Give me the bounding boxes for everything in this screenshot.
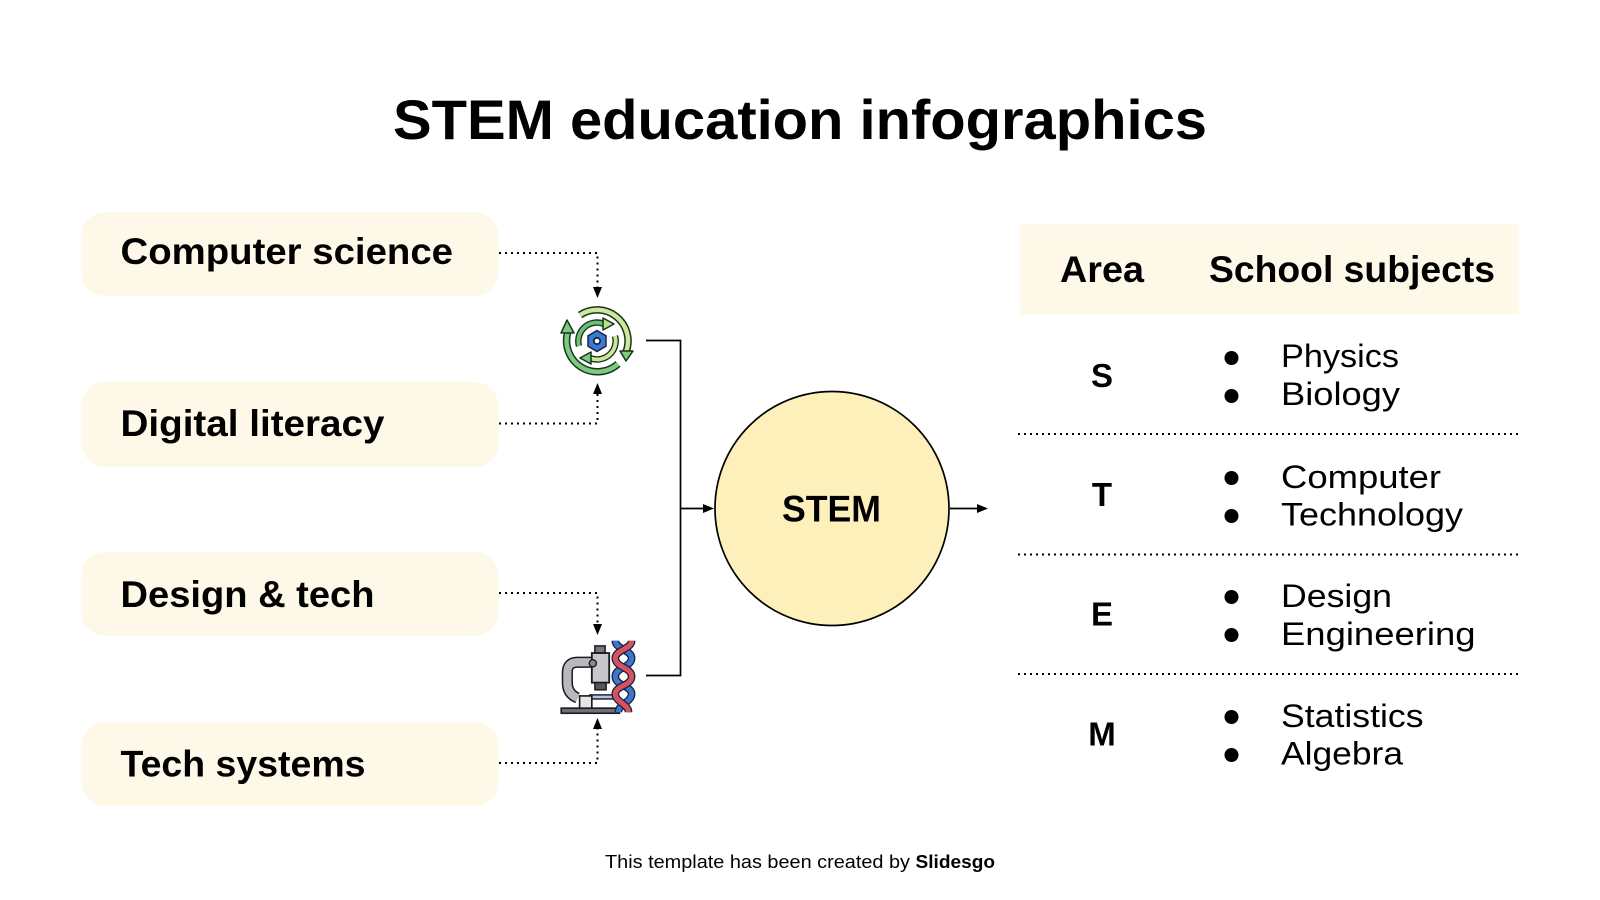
icon: microscope and DNA <box>561 641 632 713</box>
row: S: S <box>1091 357 1113 394</box>
row: E: Design <box>1281 578 1392 614</box>
panel: Design & tech: Design & tech <box>120 574 374 615</box>
circle: STEM <box>715 392 949 626</box>
arrow: Design & tech to microscope icon <box>499 593 602 635</box>
row: E <box>1091 578 1476 652</box>
row: E: Engineering <box>1281 616 1476 652</box>
row: S: Biology <box>1281 376 1400 412</box>
row: E: E <box>1091 596 1113 632</box>
footer credit: Slidesgo <box>916 852 995 872</box>
panel: Digital literacy: Digital literacy <box>120 403 385 444</box>
row: T: Technology <box>1281 496 1463 532</box>
arrow: STEM to table <box>950 504 988 513</box>
row: M: Algebra <box>1281 736 1403 772</box>
panel: Tech systems: Tech systems <box>120 744 366 784</box>
arrow: Tech systems to microscope icon <box>499 718 602 763</box>
row: S <box>1091 338 1400 412</box>
footer credit: This template has been created by <box>605 852 910 872</box>
circle: STEM: STEM <box>782 488 881 530</box>
row: T <box>1092 459 1463 532</box>
row: T: T <box>1092 476 1112 513</box>
panel: Digital literacy <box>82 382 498 467</box>
title: STEM education infographics <box>393 88 1207 151</box>
panel: Computer science: Computer science <box>120 231 453 272</box>
arrow: Computer science to cycle icon <box>499 253 602 298</box>
table: areas and school subjects <box>1018 224 1521 772</box>
row: M <box>1088 698 1424 772</box>
table header: Area <box>1060 249 1144 290</box>
table header <box>1020 224 1518 314</box>
panel: Tech systems <box>82 722 498 806</box>
icon: cycle arrows with gear <box>561 310 633 372</box>
panel: Computer science <box>82 212 498 296</box>
panel: Design & tech <box>82 552 498 636</box>
connector: icons into STEM circle <box>646 340 714 676</box>
row: M: Statistics <box>1281 698 1424 734</box>
row: S: Physics <box>1281 338 1399 374</box>
row: M: M <box>1088 716 1116 752</box>
arrow: Digital literacy to cycle icon <box>499 383 602 424</box>
table header: School subjects <box>1209 249 1495 290</box>
row: T: Computer <box>1281 459 1441 495</box>
